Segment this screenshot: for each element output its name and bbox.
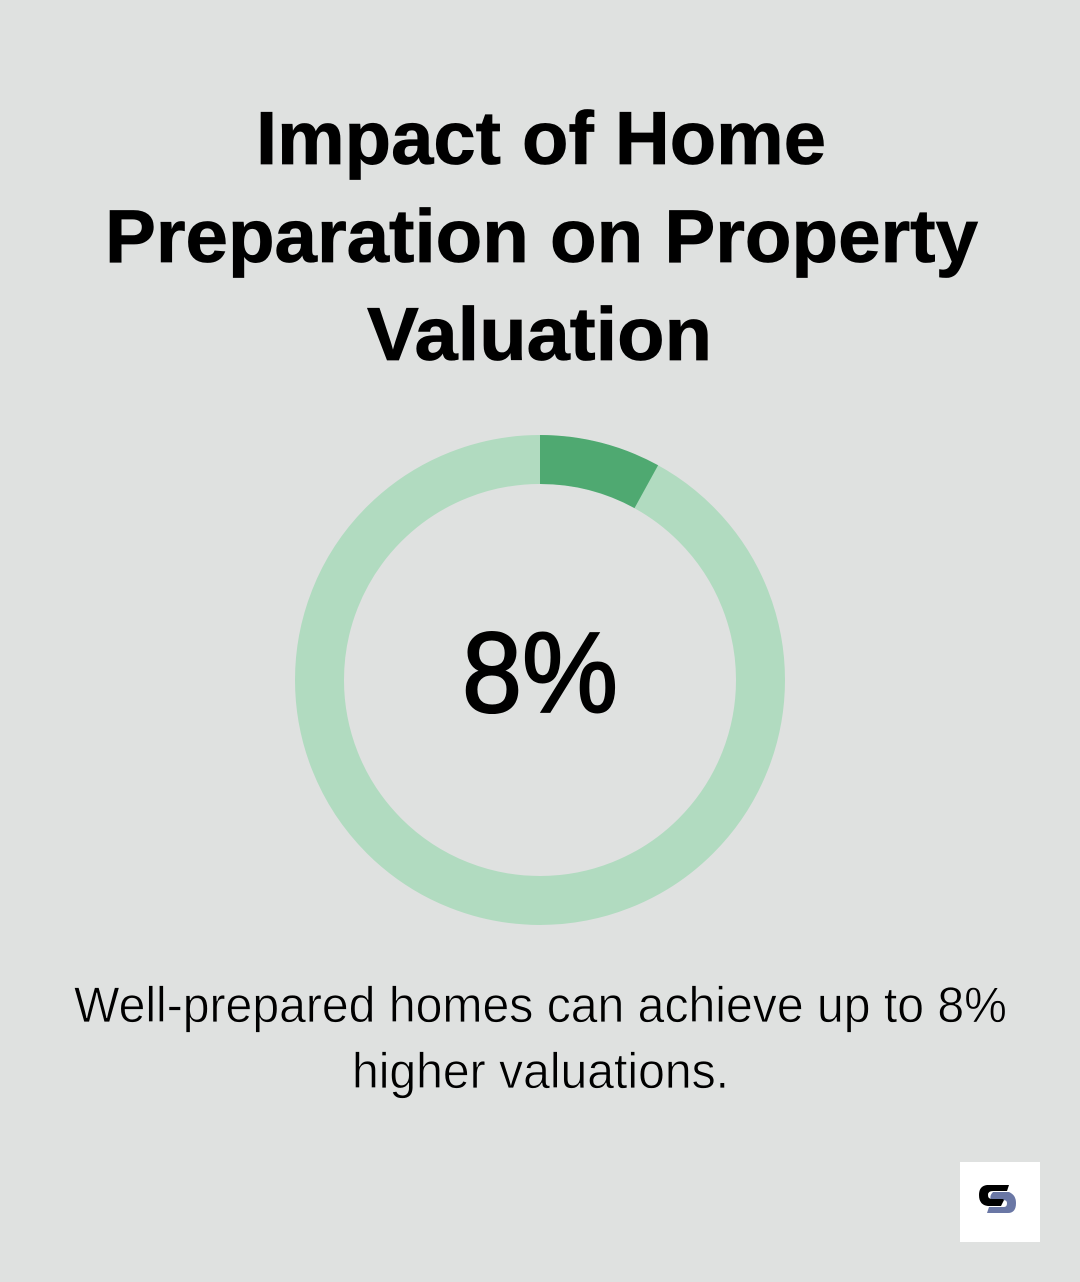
- description text: Well-prepared homes can achieve up to 8%: [74, 977, 1007, 1033]
- logo badge: [960, 1162, 1040, 1242]
- logo background: [960, 1162, 1040, 1242]
- title: Valuation: [367, 292, 712, 376]
- title: [105, 96, 978, 376]
- logo mark: lower blue part: [987, 1192, 1016, 1213]
- center value: 8%: [462, 610, 618, 737]
- donut track: [320, 460, 760, 900]
- title: Preparation on Property: [105, 194, 978, 278]
- description text: higher valuations.: [352, 1043, 729, 1099]
- logo mark: upper black part: [979, 1185, 1009, 1206]
- description text: [74, 977, 1007, 1099]
- donut highlighted segment: [540, 435, 658, 508]
- title: Impact of Home: [256, 96, 826, 180]
- donut chart: 8%: [320, 435, 760, 900]
